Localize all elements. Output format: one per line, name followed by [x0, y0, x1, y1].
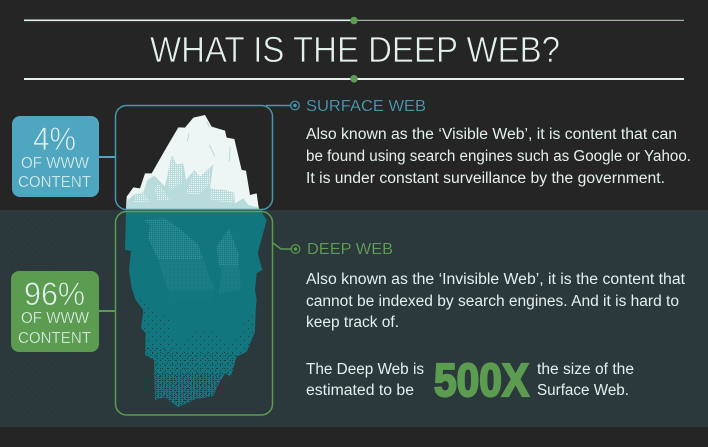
text: surface web description — [306, 126, 691, 187]
text: surface web description: be found using search engines such as Google or Yahoo. — [306, 148, 691, 165]
callout: 96% of www content: 96% — [24, 276, 85, 312]
bottom rule with dot — [24, 75, 684, 83]
text: deep web description: Also known as the ‘Invisible Web’, it is the content that — [306, 271, 686, 288]
heading: surface web: SURFACE WEB — [306, 98, 426, 115]
callout: 4% of www content: 4% — [33, 121, 76, 157]
iceberg — [125, 115, 267, 407]
callout: 96% of www content — [11, 271, 115, 352]
frame: deep web — [116, 212, 272, 415]
dither: dark lower ice — [134, 290, 255, 407]
text: deep web description: cannot be indexed by search engines. And it is hard to — [306, 293, 679, 310]
text: surface web description: Also known as the ‘Visible Web’, it is content that can — [306, 126, 677, 143]
text: size comparison right: Surface Web. — [537, 382, 629, 399]
panel: deep web band — [0, 210, 708, 427]
title: WHAT IS THE DEEP WEB? — [150, 29, 560, 70]
text: size comparison left — [306, 361, 424, 399]
callout: 96% of www content: OF WWW — [21, 310, 89, 327]
text: size comparison right — [537, 361, 634, 399]
text: deep web description: keep track of. — [306, 314, 399, 331]
connector: deep web — [273, 243, 300, 253]
iceberg above water — [126, 115, 259, 210]
text: size comparison left: The Deep Web is — [306, 361, 424, 378]
text: deep web description — [306, 271, 686, 331]
callout: 4% of www content: OF WWW — [21, 155, 89, 172]
connector: surface web — [266, 101, 299, 110]
text: size comparison right: the size of the — [537, 361, 634, 378]
callout: 4% of www content — [12, 116, 115, 197]
text: surface web description: It is under constant surveillance by the government. — [306, 170, 665, 187]
callout: 4% of www content: CONTENT — [18, 174, 92, 191]
frame: surface web — [116, 106, 272, 210]
text: size comparison left: estimated to be — [306, 382, 414, 399]
stat: 500X: 500X — [434, 354, 529, 406]
heading: deep web: DEEP WEB — [307, 241, 393, 258]
title block — [24, 17, 684, 83]
dither: light facets — [143, 218, 241, 302]
iceberg below water — [125, 211, 267, 407]
top rule with dot — [24, 17, 684, 24]
callout: 96% of www content: CONTENT — [18, 330, 92, 347]
